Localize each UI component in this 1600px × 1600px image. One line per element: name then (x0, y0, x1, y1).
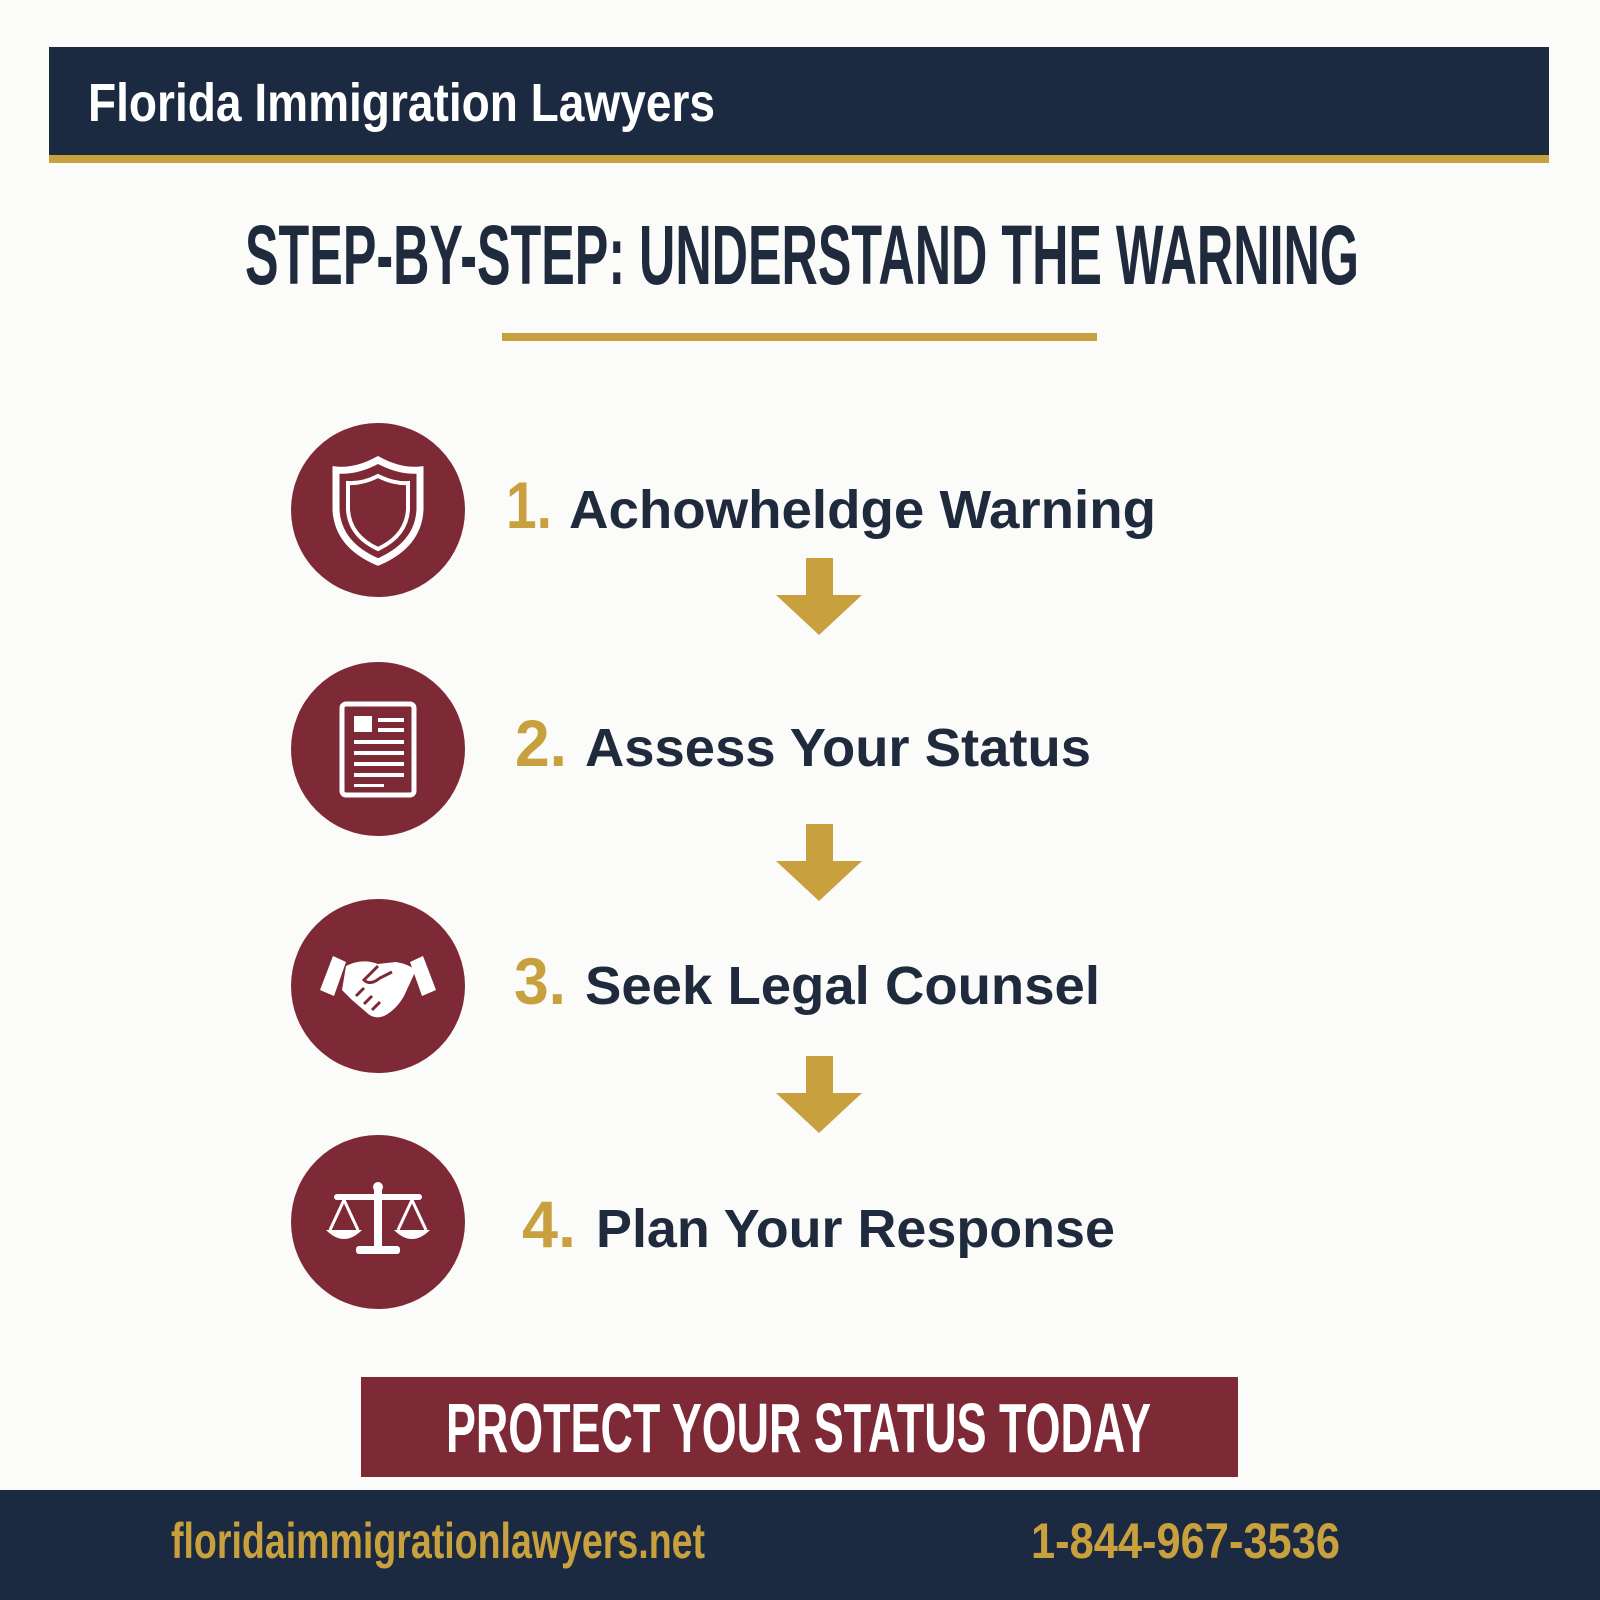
step 4 (291, 1135, 1115, 1309)
icon: shield (291, 423, 465, 597)
step 3 (291, 899, 1100, 1073)
footer (0, 1490, 1600, 1600)
heading underline (502, 333, 1097, 341)
header title: Florida Immigration Lawyers (88, 73, 715, 133)
step 1 (291, 423, 1156, 597)
step 2 label: 2. (515, 706, 567, 780)
arrow 3 (776, 1056, 862, 1133)
step 3 label: Seek Legal Counsel (585, 956, 1100, 1016)
call-to-action banner (361, 1377, 1238, 1477)
footer phone: 1-844-967-3536 (1031, 1513, 1340, 1569)
arrow 2 (776, 824, 862, 901)
call-to-action banner: PROTECT YOUR STATUS TODAY (446, 1389, 1151, 1467)
footer website: floridaimmigrationlawyers.net (171, 1513, 705, 1569)
header bar (49, 47, 1549, 163)
step 2 label: Assess Your Status (585, 718, 1091, 778)
step 3 label: 3. (514, 944, 566, 1018)
icon: scales (291, 1135, 465, 1309)
icon: handshake (291, 899, 465, 1073)
step 1 label: Achowheldge Warning (569, 480, 1156, 540)
icon: document (291, 662, 465, 836)
step 4 label: Plan Your Response (596, 1199, 1115, 1259)
step 1 label: 1. (506, 468, 552, 542)
step 4 label: 4. (522, 1187, 576, 1261)
step 2 (291, 662, 1091, 836)
arrow 1 (776, 558, 862, 635)
